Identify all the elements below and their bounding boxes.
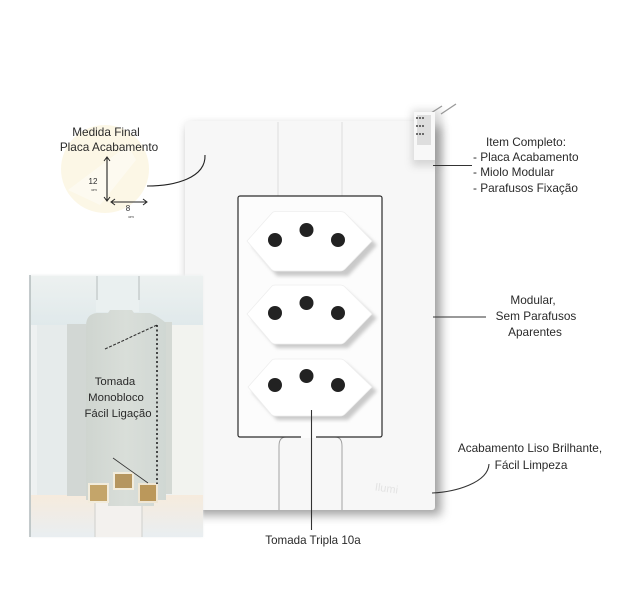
terminal 3	[139, 484, 157, 502]
text block: complete item: Item Completo:	[486, 135, 566, 149]
text block: complete item: - Parafusos Fixação	[473, 181, 578, 195]
icon: measurement dimensions circle: cm	[128, 214, 134, 219]
text: monobloc socket: Fácil Ligação	[84, 408, 152, 420]
icon: measurement dimensions circle	[61, 125, 149, 219]
panel: rear view photo	[30, 275, 203, 537]
dotted callout	[156, 325, 158, 484]
icon: socket 1	[247, 212, 377, 276]
text block: glossy finish: Acabamento Liso Brilhante,	[458, 441, 602, 455]
panel: socket frame	[238, 196, 382, 437]
icon: plate brand mark: Ilumi	[374, 481, 399, 497]
callout line: glossy finish	[432, 464, 489, 493]
icon: measurement dimensions circle: cm	[91, 187, 97, 192]
text: monobloc socket: Tomada	[95, 376, 136, 388]
text block: triple socket: Tomada Tripla 10a	[265, 534, 361, 547]
heading: final measurement label	[60, 125, 159, 154]
icon: socket 2	[247, 285, 377, 348]
text: monobloc socket: Monobloco	[88, 392, 144, 404]
text block: modular	[496, 293, 576, 339]
panel: wall plate	[185, 121, 441, 515]
text block: glossy finish: Fácil Limpeza	[495, 458, 568, 472]
module body	[86, 310, 166, 506]
text block: complete item	[473, 135, 579, 195]
text: monobloc socket	[84, 376, 152, 420]
text block: complete item: - Miolo Modular	[473, 165, 554, 179]
callout line: triple socket	[310, 410, 312, 530]
heading: final measurement label: Medida Final	[72, 125, 140, 139]
text block: modular: Aparentes	[508, 325, 562, 339]
icon: measurement dimensions circle: 12	[89, 177, 98, 186]
text block: glossy finish	[458, 441, 602, 472]
terminal 1	[89, 484, 108, 502]
callout line: measurement	[147, 155, 205, 186]
heading: final measurement label: Placa Acabamento	[60, 140, 159, 154]
icon: socket 3	[248, 359, 377, 420]
callout line: complete item	[433, 164, 472, 166]
terminal 2	[114, 473, 133, 489]
icon: screws and module	[412, 104, 456, 166]
text block: modular: Sem Parafusos	[496, 309, 576, 323]
text block: modular: Modular,	[510, 293, 556, 307]
callout line: modular	[433, 316, 486, 318]
icon: measurement dimensions circle: 8	[126, 204, 131, 213]
dashed callout	[105, 325, 157, 349]
text block: complete item: - Placa Acabamento	[473, 150, 579, 164]
thin callout	[113, 458, 148, 483]
